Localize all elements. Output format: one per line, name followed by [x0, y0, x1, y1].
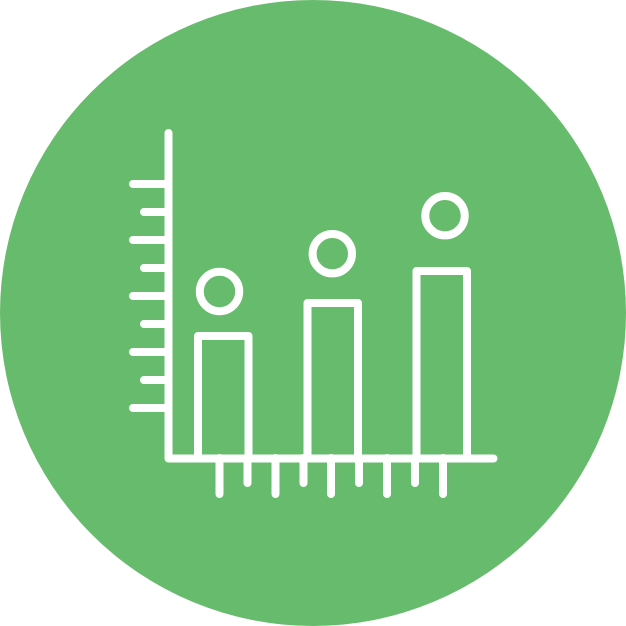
bar chart icon	[133, 133, 494, 494]
chart axes	[168, 133, 494, 458]
circle marker 3	[425, 196, 465, 235]
bar 2	[308, 303, 358, 458]
circle marker 1	[200, 272, 239, 311]
circle marker 2	[313, 234, 352, 273]
bar 1	[198, 336, 248, 458]
y axis tick marks	[133, 184, 168, 408]
x axis tick marks	[220, 458, 443, 494]
bar 3	[416, 271, 467, 458]
